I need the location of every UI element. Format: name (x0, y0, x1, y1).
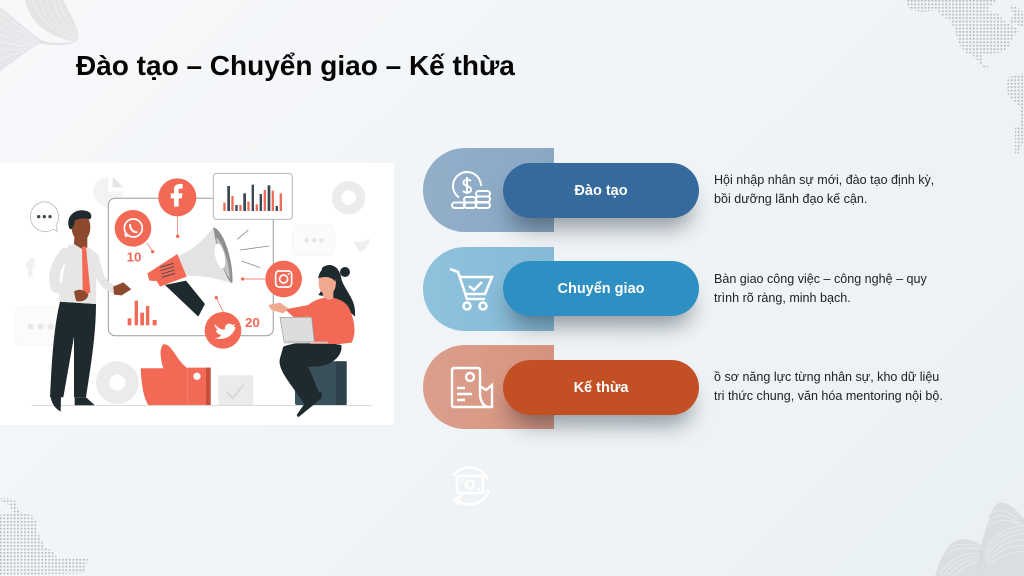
text: Kế thừa description: ồ sơ năng lực từng nhân sự, kho dữ liệu (714, 370, 939, 384)
speech bubble (30, 202, 59, 232)
tab: Đào tạo (423, 148, 554, 232)
panel: Kế thừa row (423, 345, 704, 440)
text: Kế thừa description: tri thức chung, văn hóa mentoring nội bộ. (714, 389, 943, 403)
seated woman (268, 265, 355, 417)
man presenting (50, 210, 131, 412)
text: Đào tạo description (714, 173, 934, 206)
text: Chuyển giao description: Bàn giao công việc – công nghệ – quy (714, 272, 927, 286)
tab: Kế thừa (423, 345, 554, 429)
stat labels and mini bars: 20 (245, 315, 260, 330)
pill: Kế thừa (503, 360, 699, 415)
connector lines (147, 215, 265, 313)
megaphone (147, 227, 269, 317)
text: Chuyển giao description (714, 272, 927, 305)
pill: Chuyển giao: Chuyển giao (557, 281, 644, 297)
thumbs up (141, 344, 211, 405)
bar chart card (213, 173, 292, 219)
faded background icons (15, 177, 370, 405)
text: Kế thừa description (714, 370, 943, 403)
icon: document (450, 366, 494, 408)
icon: whatsapp (115, 210, 151, 247)
panel: Chuyển giao row (423, 247, 704, 340)
ground line (32, 404, 372, 407)
title: Đào tạo – Chuyển giao – Kế thừa (76, 50, 515, 81)
pill: Kế thừa: Kế thừa (574, 380, 628, 396)
icon: instagram (265, 261, 302, 297)
text: Đào tạo description: Hội nhập nhân sự mới, đào tạo định kỳ, (714, 173, 934, 187)
text: Chuyển giao description: trình rõ ràng, minh bạch. (714, 291, 851, 305)
pill: Chuyển giao (503, 261, 699, 316)
icon: faded money cycle (452, 466, 490, 506)
pill: Đào tạo: Đào tạo (574, 183, 628, 199)
central frame (108, 198, 273, 336)
icon: shopping cart (450, 268, 494, 311)
tab: Chuyển giao (423, 247, 554, 331)
stat labels and mini bars (127, 249, 260, 330)
text: Đào tạo description: bồi dưỡng lãnh đạo kế cận. (714, 192, 867, 206)
icon: facebook (158, 178, 196, 216)
icon: coins (451, 171, 491, 209)
icon: twitter (205, 312, 241, 349)
panel: Đào tạo row (423, 148, 704, 242)
stat labels and mini bars: 10 (127, 249, 141, 264)
pill: Đào tạo (503, 163, 699, 218)
